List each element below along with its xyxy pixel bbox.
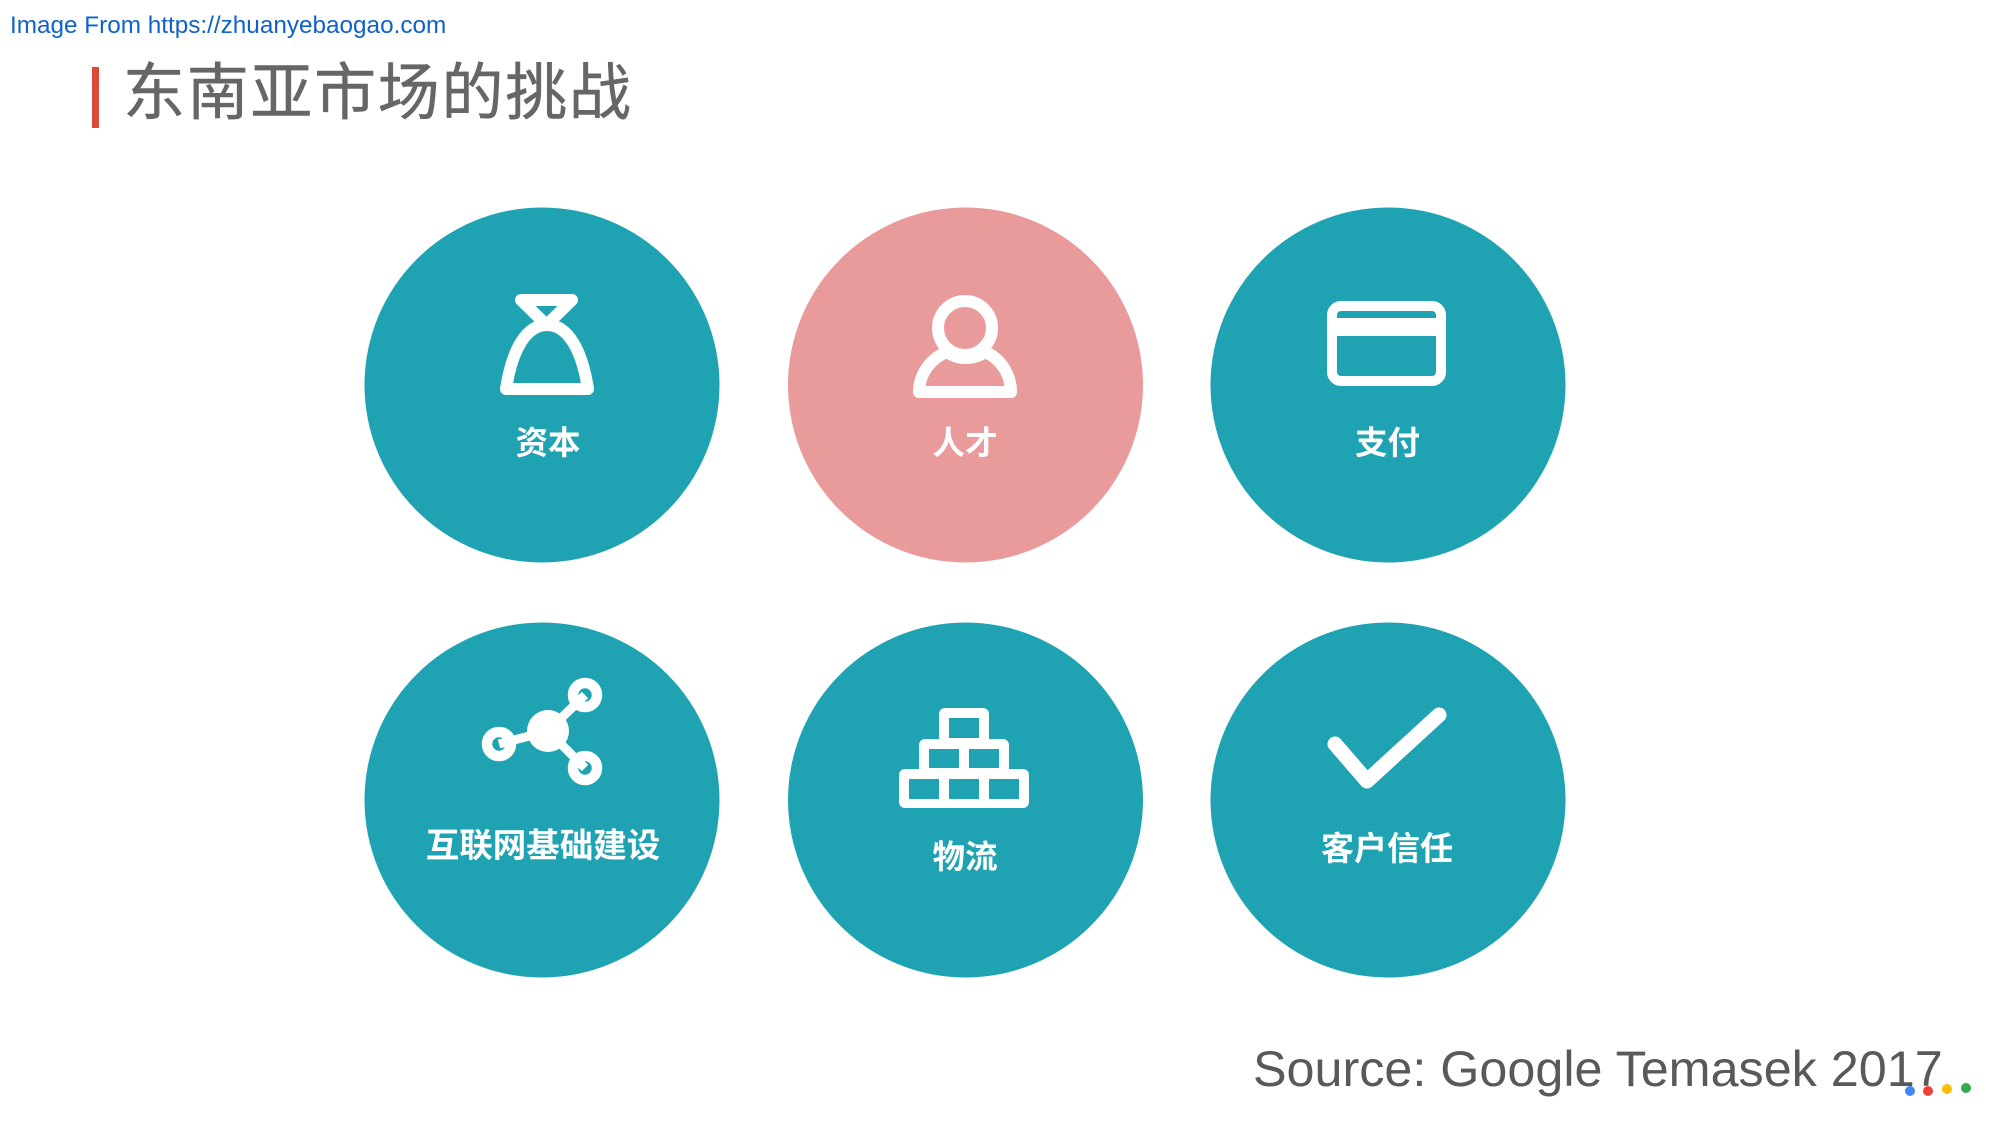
- panel: 资本: [364, 208, 720, 562]
- panel: 客户信任: [1210, 622, 1566, 978]
- source note: Source: Google Temasek 2017: [1253, 1040, 1943, 1097]
- title accent bar: [92, 67, 99, 128]
- icon: stacked boxes: [899, 708, 1029, 808]
- panel: 物流: [788, 622, 1143, 978]
- label: 人才: 人才: [932, 425, 998, 461]
- label: 支付: 支付: [1355, 425, 1420, 461]
- title: 东南亚市场的挑战: [123, 59, 633, 128]
- icon: payment card: [1332, 306, 1441, 381]
- icon: person: [919, 301, 1011, 392]
- watermark link text: Image From https://zhuanyebaogao.com: [10, 12, 446, 39]
- label: 物流: 物流: [932, 839, 998, 875]
- label: 互联网基础建设: 互联网基础建设: [426, 828, 660, 865]
- panel: 互联网基础建设: [364, 622, 720, 978]
- panel: 人才: [788, 208, 1143, 562]
- icon: four coloured dots: [1905, 1083, 1971, 1096]
- icon: network nodes: [487, 683, 597, 780]
- label: 客户信任: 客户信任: [1321, 830, 1453, 867]
- icon: check mark: [1335, 715, 1439, 781]
- icon: money bag: [506, 300, 588, 389]
- panel: 支付: [1210, 208, 1566, 562]
- label: 资本: 资本: [515, 425, 581, 461]
